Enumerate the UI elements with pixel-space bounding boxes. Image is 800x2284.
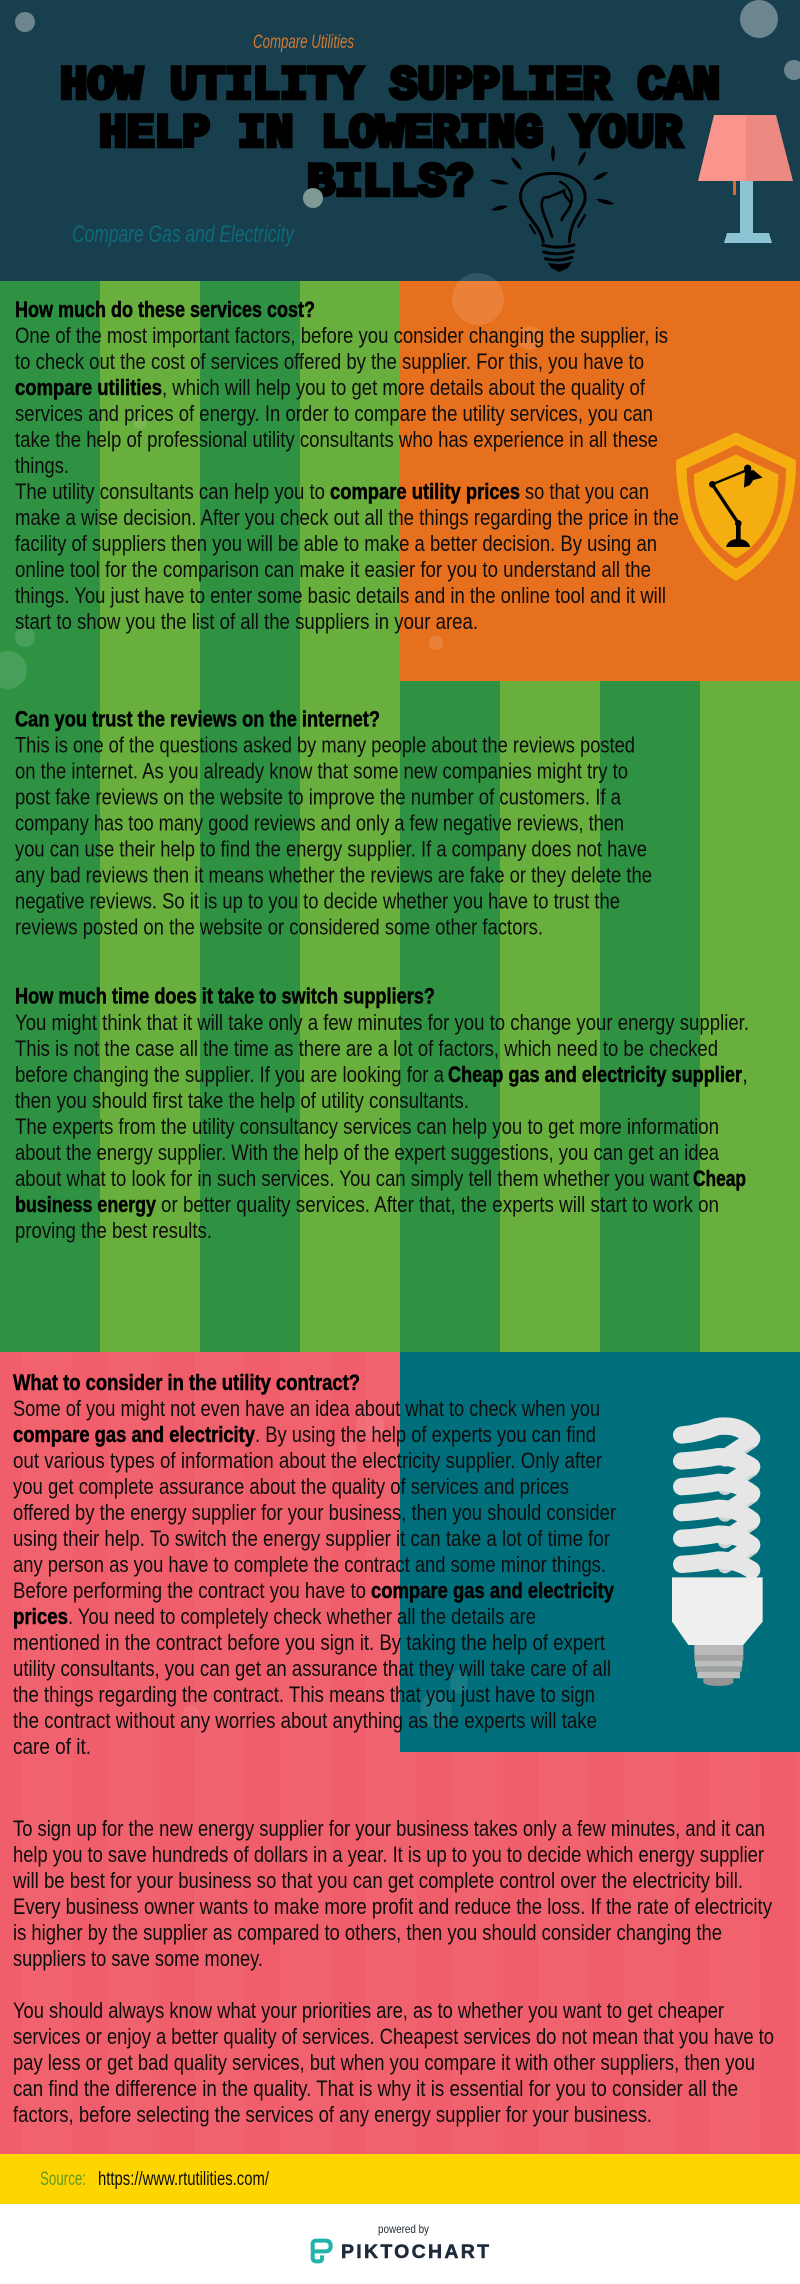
panel: source bar xyxy=(0,2154,800,2204)
text block: how much time to switch: business energy xyxy=(15,1192,157,1217)
text block: can you trust the reviews: you can use their help to find the energy supplier. If a company does not have xyxy=(15,836,647,862)
text block: how much do these services cost: take the help of professional utility consultants who has experience in all these xyxy=(15,427,658,452)
text block: what to consider in the utility contract: offered by the energy supplier for your business, then you should consider xyxy=(13,1500,616,1525)
orange block xyxy=(400,281,800,681)
text block: can you trust the reviews: reviews posted on the website or considered some other factors. xyxy=(15,914,543,940)
text block: what to consider in the utility contract: What to consider in the utility contract? xyxy=(13,1370,360,1395)
panel: green section xyxy=(0,273,800,1352)
panel: pink section xyxy=(0,1352,800,2154)
text block: what to consider in the utility contract: care of it. xyxy=(13,1734,91,1759)
text block: how much do these services cost: so that you can xyxy=(525,479,649,504)
source url: https://www.rtutilities.com/ xyxy=(98,2169,270,2190)
text block: how much do these services cost: compare utility prices xyxy=(330,479,520,504)
text block: what to consider in the utility contract: . You need to completely check whether all the details are xyxy=(68,1604,536,1629)
text block: how much do these services cost: facility of suppliers then you will be able to make a better decision. By using an xyxy=(15,531,657,556)
text block: how much do these services cost: The utility consultants can help you to xyxy=(15,479,325,504)
text block: how much time to switch: then you should first take the help of utility consultants. xyxy=(15,1088,469,1113)
text block: what to consider in the utility contract: out various types of information about the electricity supplier. Only after xyxy=(13,1448,602,1473)
text block: how much time to switch: or better quality services. After that, the experts will start to work on xyxy=(161,1192,719,1217)
text block: what to consider in the utility contract: compare gas and electricity xyxy=(371,1578,615,1603)
text block: can you trust the reviews: on the internet. As you already know that some new companies might try to xyxy=(15,758,628,784)
text block: how much time to switch: How much time does it take to switch suppliers? xyxy=(15,984,435,1008)
text block: how much time to switch: Cheap gas and electricity supplier xyxy=(448,1062,742,1087)
text block: how much time to switch: Cheap xyxy=(693,1166,746,1191)
icon: piktochart logo xyxy=(313,2241,331,2261)
text block: what to consider in the utility contract: mentioned in the contract before you sign it. By taking the help of expert xyxy=(13,1630,605,1655)
text block: can you trust the reviews: post fake reviews on the website to improve the number of customers. If a xyxy=(15,784,622,810)
text block: what to consider in the utility contract: compare gas and electricity xyxy=(13,1422,256,1447)
text block: how much do these services cost: make a wise decision. After you check out all the things regarding the price in the xyxy=(15,505,679,530)
text block: what to consider in the utility contract xyxy=(13,1370,616,1759)
decorative circles xyxy=(15,0,800,80)
text block: can you trust the reviews: any bad reviews then it means whether the reviews are fake or they delete the xyxy=(15,862,652,888)
decorative circles xyxy=(182,1410,468,1729)
icon: shield with desk lamp xyxy=(676,432,796,581)
text block: how much do these services cost xyxy=(15,297,679,634)
text block: how much do these services cost: to check out the cost of services offered by the supplier. For this, you have to xyxy=(15,349,644,374)
text block: how much do these services cost: things. xyxy=(15,453,69,478)
source label: Source: xyxy=(40,2169,86,2190)
text block: how much do these services cost: things. You just have to enter some basic details and in the online tool and it will xyxy=(15,583,666,608)
text block: how much time to switch xyxy=(15,984,749,1243)
text block: what to consider in the utility contract: any person as you have to complete the contract and some minor things. xyxy=(13,1552,606,1577)
text block: what to consider in the utility contract: . By using the help of experts you can find xyxy=(255,1422,596,1447)
text block: what to consider in the utility contract: Some of you might not even have an idea about what to check when you xyxy=(13,1396,600,1421)
text block: can you trust the reviews: Can you trust the reviews on the internet? xyxy=(15,706,380,732)
icon: table lamp xyxy=(698,115,793,243)
title xyxy=(60,60,720,209)
powered by: powered by xyxy=(378,2222,429,2236)
text block: how much time to switch: proving the best results. xyxy=(15,1218,212,1243)
text block: what to consider in the utility contract: you get complete assurance about the quality of services and prices xyxy=(13,1474,569,1499)
text block: how much do these services cost: , which will help you to get more details about the quality of xyxy=(162,375,646,400)
text block: can you trust the reviews xyxy=(15,706,652,940)
text block: signing up paragraph: suppliers to save some money. xyxy=(13,1946,263,1971)
text block: priorities paragraph: factors, before selecting the services of any energy supplier for your business. xyxy=(13,2102,652,2127)
subtitle: compare utilities: Compare Utilities xyxy=(253,32,354,53)
text block: what to consider in the utility contract: Before performing the contract you have to xyxy=(13,1578,366,1603)
piktochart wordmark: PIKTOCHART xyxy=(341,2241,489,2263)
icon: spiral energy saving bulb xyxy=(672,1426,763,1686)
decorative circles xyxy=(0,273,542,689)
title: HOW UTILITY SUPPLIER CAN xyxy=(60,60,720,112)
text block: priorities paragraph xyxy=(13,1998,774,2127)
text block: how much do these services cost: online tool for the comparison can make it easier for you to understand all the xyxy=(15,557,651,582)
text block: what to consider in the utility contract: the contract without any worries about anything as the experts will take xyxy=(13,1708,597,1733)
text block: what to consider in the utility contract: utility consultants, you can get an assurance that they will take care of all xyxy=(13,1656,611,1681)
text block: how much time to switch: before changing the supplier. If you are looking for a xyxy=(15,1062,445,1087)
text block: what to consider in the utility contract: the things regarding the contract. This means that you just have to sign xyxy=(13,1682,595,1707)
text block: how much do these services cost: compare utilities xyxy=(15,375,162,400)
text block: how much do these services cost: How much do these services cost? xyxy=(15,297,315,322)
text block: how much time to switch: about what to look for in such services. You can simply tell them whether you want xyxy=(15,1166,689,1191)
title: HELP IN LOWERING YOUR xyxy=(99,108,682,160)
text block: how much do these services cost: One of the most important factors, before you consider changing the supplier, is xyxy=(15,323,668,348)
text block: how much time to switch: , xyxy=(742,1062,748,1087)
subtitle: compare gas and electricity: Compare Gas and Electricity xyxy=(72,221,295,248)
title: BILLS? xyxy=(307,157,474,209)
text block: how much do these services cost: start to show you the list of all the suppliers in your area. xyxy=(15,609,478,634)
panel: footer xyxy=(0,2204,800,2284)
text block: what to consider in the utility contract: using their help. To switch the energy supplier it can take a lot of time for xyxy=(13,1526,610,1551)
text block: can you trust the reviews: company has too many good reviews and only a few negative reviews, then xyxy=(15,810,624,836)
text block: what to consider in the utility contract: prices xyxy=(13,1604,68,1629)
icon: light bulb xyxy=(490,145,614,272)
teal block xyxy=(400,1352,800,1752)
text block: signing up paragraph xyxy=(12,1816,772,1971)
panel: header xyxy=(0,0,800,281)
text block: can you trust the reviews: This is one of the questions asked by many people about the reviews posted xyxy=(15,732,635,758)
text block: can you trust the reviews: negative reviews. So it is up to you to decide whether you have to trust the xyxy=(15,888,620,914)
text block: how much do these services cost: services and prices of energy. In order to compare the utility services, you can xyxy=(15,401,653,426)
circle over title xyxy=(303,188,323,208)
